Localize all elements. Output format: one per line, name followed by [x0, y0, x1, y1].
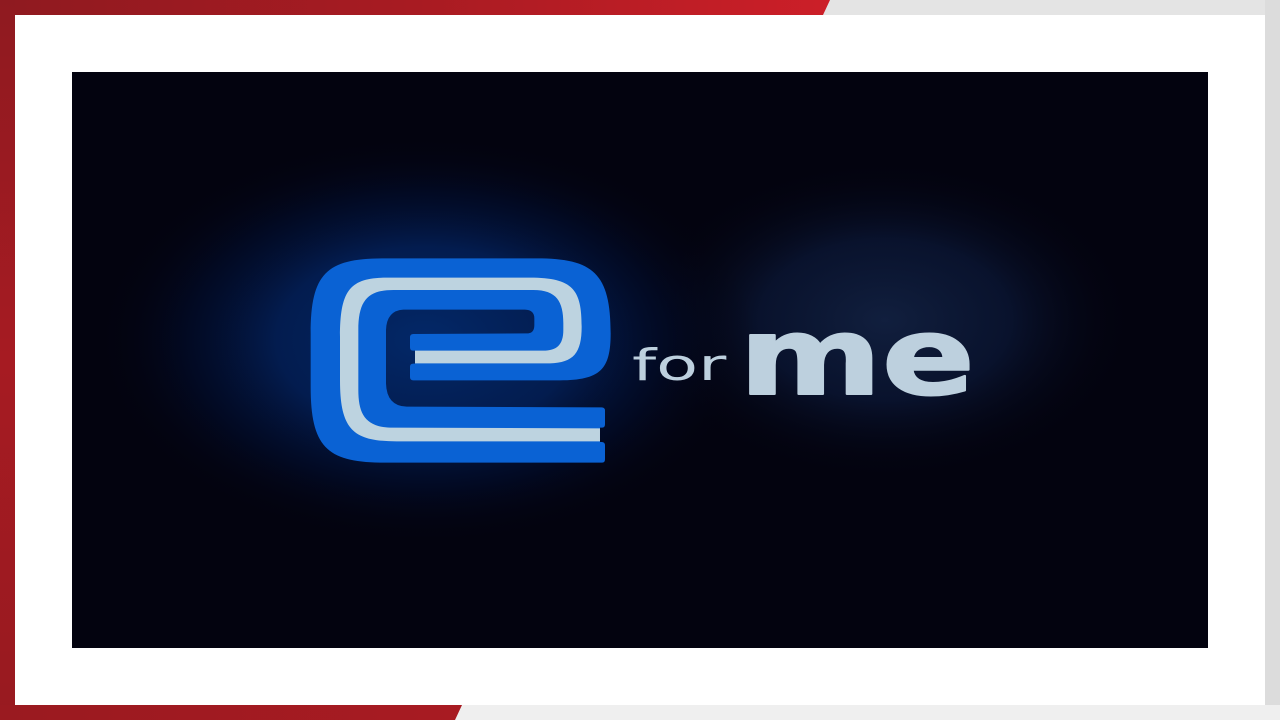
wordmark: for: for	[632, 339, 727, 391]
frame: bottom grey bar	[450, 705, 1280, 720]
frame: top red bar	[0, 0, 830, 15]
icon: e logo mark	[311, 258, 611, 463]
wordmark: me: me	[739, 294, 975, 420]
frame: right grey bar	[1265, 0, 1280, 720]
frame: top grey bar	[820, 0, 1280, 15]
frame: left red bar	[0, 0, 15, 720]
frame: bottom red bar	[0, 705, 462, 720]
panel: dark logo background	[72, 72, 1208, 648]
